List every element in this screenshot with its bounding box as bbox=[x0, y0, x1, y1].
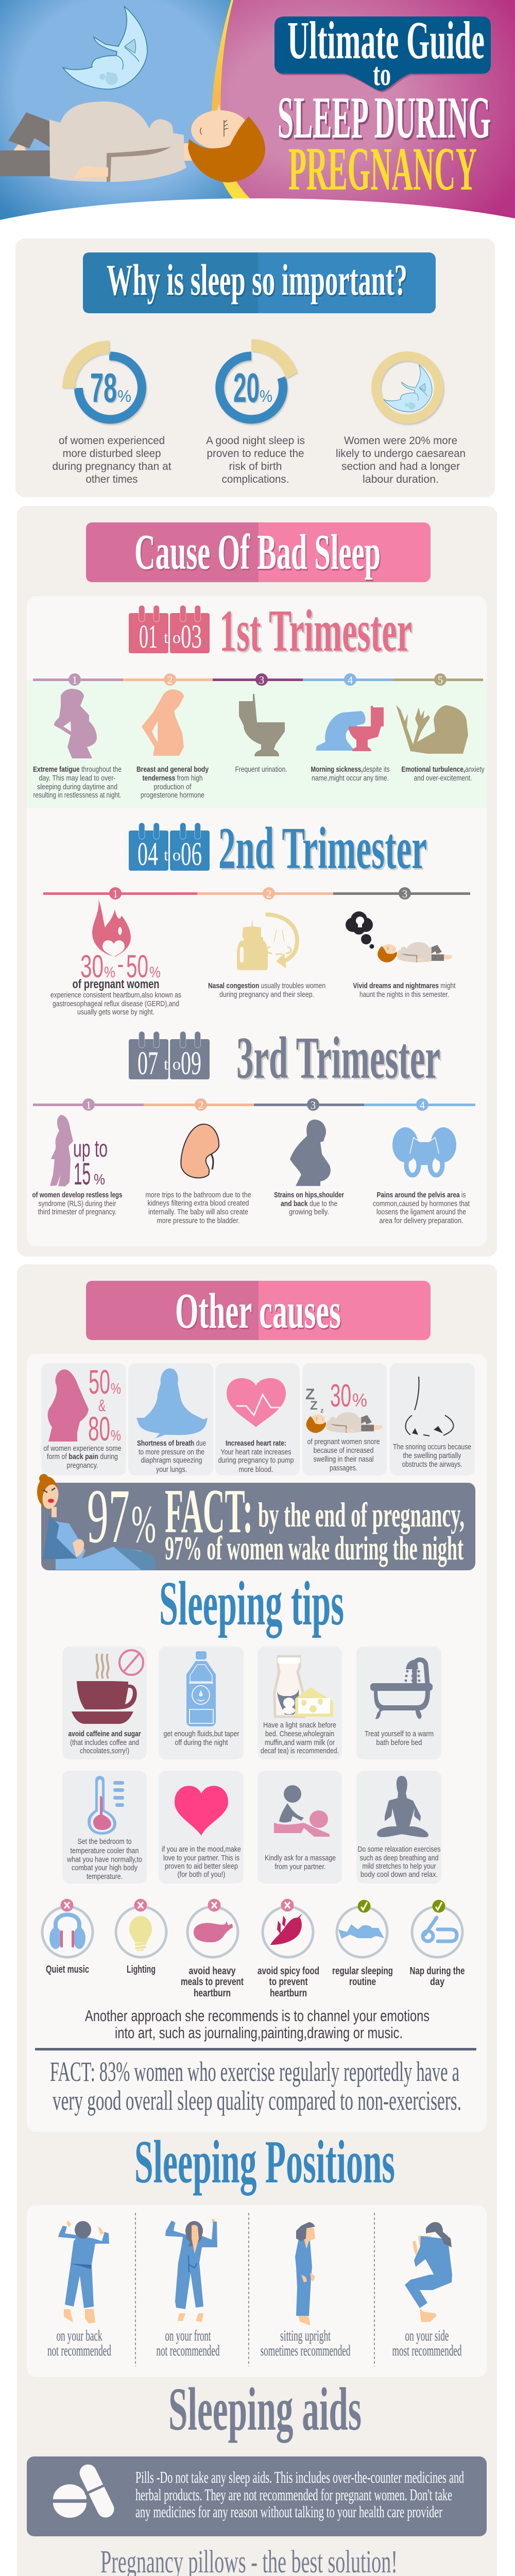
icon: baby bottle and nose bbox=[237, 914, 297, 970]
heading: why is sleep so important bbox=[83, 252, 436, 313]
icon: pregnant woman silhouette bbox=[54, 689, 97, 758]
captions: first trimester: Extreme fatigue throughout the bbox=[33, 765, 122, 774]
calendar: months 01 to 03 bbox=[129, 605, 210, 655]
card: shortness of breath: Shortness of breath due bbox=[137, 1439, 206, 1448]
card: snoring statistic: swelling in their nasal bbox=[313, 1455, 374, 1464]
stat: caesarean likelihood with moon: section and had a longer bbox=[341, 461, 460, 472]
heading: other causes bbox=[86, 1281, 431, 1340]
labels: positions: on your side bbox=[405, 2327, 449, 2344]
tip card: relaxation exercises: mild stretches to help your bbox=[363, 1862, 436, 1871]
card: snoring statistic: because of increased bbox=[313, 1446, 374, 1455]
tip card: light snack: bed. Cheese,wholegrain bbox=[265, 1730, 334, 1738]
tip card: relaxation exercises: Do some relaxation exercises bbox=[357, 1845, 441, 1854]
card: snoring statistic bbox=[302, 1363, 387, 1476]
stat: up to 15 percent: up to bbox=[73, 1135, 108, 1162]
tip card: make love: proven to aid better sleep bbox=[165, 1862, 238, 1871]
icon: regular sleeping routine: routine bbox=[349, 1976, 376, 1988]
tip card: light snack: decaf tea) is recommended. bbox=[261, 1747, 339, 1755]
tip card: cool bedroom: what you have normally,to bbox=[66, 1855, 142, 1864]
stat: 97 percent: 97 bbox=[87, 1473, 130, 1559]
stat: 30 to 50 percent heartburn: 30 bbox=[80, 949, 104, 985]
card: back pain: pregnancy. bbox=[67, 1461, 98, 1470]
card: snoring and nose: the swelling partially bbox=[403, 1451, 461, 1460]
icon: nap during the day: day bbox=[430, 1976, 445, 1988]
caption: pelvis pain: Pains around the pelvis area is bbox=[377, 1191, 466, 1199]
calendar: months 01 to 03: 01 bbox=[139, 618, 158, 655]
stat: 20 percent: complications. bbox=[221, 473, 289, 485]
labels: positions: most recommended bbox=[392, 2342, 461, 2359]
caption: pelvis pain bbox=[373, 1191, 470, 1225]
captions: first trimester: Breast and general body bbox=[136, 765, 209, 774]
stat: 30 to 50 percent heartburn: 50 bbox=[126, 949, 148, 985]
captions: first trimester: progesterone hormone bbox=[141, 791, 204, 800]
captions: first trimester: Emotional turbulence,anxiety bbox=[402, 765, 485, 774]
stat: 20 percent: proven to reduce the bbox=[207, 448, 304, 460]
caption: strains: and back due to the bbox=[281, 1199, 337, 1208]
tip card: avoid caffeine: avoid caffeine and sugar bbox=[68, 1730, 141, 1738]
labels: positions: on your front bbox=[165, 2327, 211, 2344]
tip card: relaxation exercises bbox=[356, 1771, 441, 1884]
caption: nasal congestion: Nasal congestion usually troubles women bbox=[208, 981, 325, 990]
caption: bathroom trips: more pressure to the bladder. bbox=[157, 1216, 240, 1225]
icon: spicy food: avoid spicy food bbox=[258, 1965, 319, 1977]
icon: kidney bbox=[181, 1124, 219, 1178]
header background bbox=[0, 0, 515, 232]
caption: heartburn: experience consistent heartburn,also known as bbox=[50, 991, 181, 999]
stat: caesarean likelihood with moon bbox=[336, 356, 466, 485]
stat: 78 percent: of women experienced bbox=[59, 435, 165, 447]
icon: spicy food: to prevent bbox=[269, 1976, 308, 1988]
tip card: cool bedroom: temperature cooler than bbox=[70, 1846, 139, 1855]
tip card: massage: Kindly ask for a massage bbox=[265, 1854, 336, 1862]
stat: 30 to 50 percent heartburn bbox=[80, 949, 161, 985]
title callout bbox=[274, 11, 491, 92]
timeline: three steps: 1 bbox=[113, 888, 118, 900]
caption: restless legs: syndrome (RLS) during their bbox=[38, 1199, 116, 1208]
calendar: months 04 to 06: to bbox=[164, 845, 181, 864]
card: snoring statistic: 30 bbox=[330, 1378, 351, 1414]
caption: pelvis pain: loosens the ligament around the bbox=[376, 1208, 466, 1216]
card: shortness of breath: diaphragm squeezing bbox=[141, 1456, 202, 1465]
tip card: cool bedroom: combat your high body bbox=[72, 1863, 138, 1872]
icon: nap during the day: Nap during the bbox=[410, 1965, 465, 1977]
card: back pain bbox=[41, 1363, 126, 1476]
calendar: months 07 to 09: 07 bbox=[138, 1045, 158, 1082]
stat: 78 percent: % bbox=[117, 387, 131, 405]
icon: woman at toilet bbox=[316, 706, 384, 751]
captions: first trimester: Morning sickness,despite its bbox=[311, 765, 389, 774]
card: increased heart rate: during pregnancy to pump bbox=[218, 1456, 294, 1465]
caption: vivid dreams: haunt the nights in this semester. bbox=[359, 990, 449, 999]
timeline: five steps bbox=[33, 673, 483, 686]
icon: nap during the day bbox=[410, 1900, 465, 1988]
illustration: pregnant woman in blue dress bbox=[37, 1474, 156, 1570]
stat: up to 15 percent bbox=[73, 1135, 108, 1191]
callout: 97 percent fact bbox=[37, 1473, 475, 1570]
stat: 20 percent: risk of birth bbox=[229, 461, 282, 472]
calendar: months 04 to 06: 06 bbox=[181, 836, 202, 873]
stat: 78 percent bbox=[53, 341, 171, 485]
timeline: three steps: 3 bbox=[402, 888, 407, 900]
stat: 20 percent bbox=[206, 339, 305, 485]
caption: restless legs bbox=[32, 1191, 123, 1216]
captions: first trimester: and over-excitement. bbox=[414, 774, 472, 783]
card: back pain: % bbox=[111, 1428, 121, 1444]
card: increased heart rate: Your heart rate increases bbox=[220, 1448, 291, 1456]
card: snoring statistic: % bbox=[352, 1389, 367, 1411]
card: snoring statistic: of pregnant women snore bbox=[307, 1437, 380, 1446]
card: increased heart rate bbox=[215, 1363, 300, 1476]
card: back pain: & bbox=[98, 1396, 106, 1415]
heading: sleeping aids: Sleeping aids bbox=[168, 2375, 362, 2443]
text: another approach bbox=[85, 2007, 430, 2042]
figure: on your side bbox=[405, 2222, 452, 2322]
caption: strains: growing belly. bbox=[289, 1208, 329, 1216]
figure: on your back bbox=[58, 2221, 109, 2324]
calendar: months 07 to 09: 09 bbox=[181, 1045, 201, 1082]
caption: strains: Strains on hips,shoulder bbox=[274, 1191, 344, 1199]
captions: first trimester: resulting in restlessness at night. bbox=[33, 791, 122, 800]
stat: 30 to 50 percent heartburn: % bbox=[149, 964, 161, 981]
stat: 20 percent: A good night sleep is bbox=[206, 435, 305, 447]
timeline: four steps: 1 bbox=[86, 1099, 91, 1111]
icon: pills bbox=[53, 2473, 107, 2518]
icon: nightmare cloud and sleeping woman bbox=[346, 911, 452, 962]
labels: positions: not recommended bbox=[157, 2342, 219, 2359]
caption: bathroom trips bbox=[145, 1191, 251, 1225]
tip card: light snack: Have a light snack before bbox=[263, 1721, 336, 1730]
stat: caesarean likelihood with moon: likely to undergo caesarean bbox=[336, 448, 466, 460]
stat: up to 15 percent: % bbox=[94, 1172, 105, 1188]
icon: pelvis bbox=[392, 1127, 456, 1175]
section: 3rd trimester bbox=[32, 1025, 475, 1225]
card: shortness of breath: your lungs. bbox=[156, 1465, 187, 1474]
icon: lighting bbox=[116, 1899, 166, 1975]
icon: heavy meals bbox=[181, 1899, 244, 1999]
tip card: enough fluids: off during the night bbox=[175, 1738, 228, 1747]
stat: up to 15 percent: 15 bbox=[74, 1157, 91, 1191]
caption: vivid dreams bbox=[353, 981, 456, 999]
text: exercise fact bbox=[50, 2056, 461, 2116]
caption: pelvis pain: common,caused by hormones that bbox=[373, 1199, 470, 1208]
stat: 30 to 50 percent heartburn: - bbox=[117, 955, 124, 975]
calendar: months 07 to 09 bbox=[129, 1031, 210, 1082]
card: snoring and nose bbox=[390, 1363, 475, 1476]
stat: 20 percent: % bbox=[260, 387, 272, 405]
caption: restless legs: of women develop restless legs bbox=[32, 1191, 123, 1199]
tip card: massage: from your partner. bbox=[275, 1862, 325, 1871]
card: back pain: 80 bbox=[88, 1410, 110, 1448]
icon: toilet bbox=[239, 694, 285, 756]
callout: pills warning bbox=[27, 2456, 487, 2536]
icon: woman silhouette bbox=[142, 689, 184, 756]
timeline: three steps bbox=[43, 887, 470, 900]
stat: 78 percent: during pregnancy than at bbox=[53, 461, 171, 472]
icon: lighting: Lighting bbox=[127, 1964, 156, 1975]
card: back pain: 50 bbox=[89, 1363, 110, 1401]
panel: other causes, tips, positions and aids bbox=[17, 1264, 497, 2576]
labels: positions: on your back bbox=[57, 2327, 102, 2344]
panel: why is sleep so important bbox=[15, 239, 495, 497]
timeline: five steps: 2 bbox=[167, 674, 173, 686]
heading: other causes: Other causes bbox=[175, 1283, 341, 1339]
tip card: cool bedroom: temperature. bbox=[87, 1872, 123, 1881]
captions: first trimester bbox=[33, 765, 485, 800]
icon: spicy food: heartburn bbox=[270, 1988, 307, 1999]
tip card: warm bath: bath before bed bbox=[376, 1738, 422, 1747]
labels: positions: not recommended bbox=[47, 2342, 111, 2359]
labels: positions: sitting upright bbox=[280, 2327, 331, 2344]
header banner bbox=[0, 0, 515, 232]
tip card: massage bbox=[258, 1771, 342, 1884]
stat: 20 percent: 20 bbox=[233, 365, 260, 411]
card: snoring statistic: Z bbox=[310, 1399, 318, 1413]
stat: 78 percent: 78 bbox=[90, 365, 117, 411]
tip card: cool bedroom bbox=[62, 1771, 147, 1884]
card: snoring statistic: passages. bbox=[330, 1464, 357, 1472]
stat: caesarean likelihood with moon: Women were 20% more bbox=[344, 435, 457, 447]
tip card: avoid caffeine bbox=[62, 1647, 147, 1759]
figure: on your front bbox=[165, 2219, 217, 2322]
timeline: five steps: 5 bbox=[438, 674, 443, 686]
section: 1st trimester bbox=[33, 598, 485, 800]
tip card: light snack: muffin,and warm milk (or bbox=[265, 1738, 335, 1747]
tip card: enough fluids bbox=[159, 1647, 244, 1759]
captions: first trimester: Frequent urination. bbox=[235, 765, 287, 774]
captions: first trimester: sleeping during daytime and bbox=[37, 783, 117, 791]
stat: caesarean likelihood with moon: labour duration. bbox=[363, 473, 439, 485]
caption: heartburn: gastroesophageal reflux disease (GERD),and bbox=[53, 999, 179, 1008]
icon: sleeping pregnant woman bbox=[0, 101, 265, 182]
icon: pregnant woman profile bbox=[290, 1120, 331, 1186]
icon: heavy meals: avoid heavy bbox=[188, 1965, 236, 1977]
icon: heavy meals: heartburn bbox=[194, 1988, 231, 1999]
timeline: five steps: 4 bbox=[348, 674, 353, 686]
caption: bathroom trips: internally. The baby will also create bbox=[148, 1208, 248, 1216]
figure: sitting upright bbox=[295, 2222, 315, 2326]
panel: cause of bad sleep bbox=[17, 506, 497, 1257]
stat: 78 percent: more disturbed sleep bbox=[63, 448, 161, 460]
icon: heartburn flame bbox=[92, 899, 131, 957]
tip card: make love bbox=[159, 1771, 244, 1884]
tip card: warm bath: Treat yourself to a warm bbox=[365, 1730, 434, 1738]
card: increased heart rate: more blood. bbox=[239, 1465, 273, 1474]
tip card: make love: love to your partner. This is bbox=[163, 1854, 239, 1862]
captions: first trimester: name,might occur any time. bbox=[312, 774, 389, 783]
tip card: avoid caffeine: chocolates,sorry!) bbox=[80, 1747, 129, 1755]
caption: heartburn: of pregnant women bbox=[72, 977, 160, 991]
tip card: relaxation exercises: such as deep breathing and bbox=[359, 1854, 439, 1862]
timeline: three steps: 2 bbox=[266, 888, 271, 900]
card: snoring statistic: Z bbox=[305, 1386, 315, 1403]
tip card: cool bedroom: Set the bedroom to bbox=[77, 1837, 132, 1846]
stat: 97 percent: % bbox=[131, 1495, 156, 1554]
heading: cause of bad sleep bbox=[86, 522, 431, 582]
card: snoring and nose: obstructs the airways. bbox=[402, 1460, 462, 1469]
tip card: make love: (for both of you!) bbox=[177, 1870, 226, 1879]
labels: positions: sometimes recommended bbox=[261, 2342, 350, 2359]
labels: positions bbox=[47, 2327, 461, 2359]
icon: regular sleeping routine bbox=[332, 1900, 393, 1988]
tip card: relaxation exercises: body cool down and relax. bbox=[360, 1870, 438, 1879]
stat: 78 percent: other times bbox=[85, 473, 138, 485]
caption: restless legs: third trimester of pregnancy. bbox=[38, 1208, 116, 1216]
panel: sleeping positions bbox=[27, 2205, 487, 2377]
captions: first trimester: production of bbox=[153, 783, 192, 791]
calendar: months 01 to 03: 03 bbox=[181, 618, 202, 655]
card: back pain: % bbox=[111, 1381, 121, 1397]
icon: anxious woman silhouette bbox=[396, 705, 468, 754]
tip card: light snack bbox=[258, 1647, 342, 1759]
card: back pain: form of back pain during bbox=[47, 1452, 118, 1461]
text: fact statement: FACT: bbox=[165, 1477, 253, 1546]
tip card: warm bath bbox=[356, 1647, 441, 1759]
icon: heavy meals: meals to prevent bbox=[181, 1976, 244, 1988]
icon: quiet music: Quiet music bbox=[46, 1964, 89, 1975]
card: snoring statistic: z bbox=[320, 1406, 324, 1414]
caption: nasal congestion: during pregnancy and their sleep. bbox=[219, 990, 314, 999]
captions: first trimester: tenderness from high bbox=[142, 774, 203, 783]
timeline: four steps: 4 bbox=[420, 1099, 425, 1111]
icon: regular sleeping routine: regular sleeping bbox=[332, 1965, 393, 1977]
heading: sleeping tips: Sleeping tips bbox=[159, 1569, 344, 1638]
text: fact statement bbox=[165, 1477, 465, 1567]
captions: first trimester: day. This may lead to over- bbox=[39, 774, 115, 783]
caption: bathroom trips: more trips to the bathroom due to the bbox=[145, 1191, 251, 1199]
calendar: months 04 to 06 bbox=[129, 823, 210, 873]
tip card: enough fluids: get enough fluids,but taper bbox=[164, 1730, 239, 1738]
icon: crescent moon bbox=[63, 6, 147, 89]
stat: 30 to 50 percent heartburn: % bbox=[104, 964, 115, 981]
icon: spicy food bbox=[258, 1899, 319, 1999]
text: pills warning bbox=[135, 2468, 464, 2521]
caption: strains bbox=[274, 1191, 344, 1216]
caption: vivid dreams: Vivid dreams and nightmares might bbox=[353, 981, 456, 990]
timeline: four steps: 3 bbox=[311, 1099, 316, 1111]
timeline: four steps: 2 bbox=[198, 1099, 203, 1111]
caption: heartburn bbox=[50, 977, 181, 1016]
timeline: five steps: 3 bbox=[259, 674, 264, 686]
card: snoring and nose: The snoring occurs because bbox=[393, 1443, 471, 1451]
calendar: months 04 to 06: 04 bbox=[138, 836, 158, 873]
caption: nasal congestion bbox=[208, 981, 325, 999]
icon: quiet music bbox=[42, 1899, 93, 1975]
caption: pelvis pain: area for delivery preparation. bbox=[379, 1216, 464, 1225]
timeline: four steps bbox=[33, 1098, 475, 1111]
tip card: avoid caffeine: (that includes coffee and bbox=[70, 1738, 139, 1747]
text: another approach: into art, such as journaling,painting,drawing or music. bbox=[115, 2024, 403, 2042]
card: shortness of breath: to more pressure on the bbox=[139, 1448, 204, 1456]
timeline: five steps: 1 bbox=[72, 674, 77, 686]
section: 2nd trimester bbox=[43, 816, 470, 1016]
title callout: to bbox=[373, 57, 391, 92]
calendar: months 07 to 09: to bbox=[164, 1055, 181, 1073]
caption: bathroom trips: kidneys filtering extra blood created bbox=[147, 1199, 249, 1208]
icon: woman with restless legs bbox=[50, 1115, 73, 1187]
card: back pain: of women experience some bbox=[43, 1444, 122, 1453]
tip card: make love: if you are in the mood,make bbox=[162, 1845, 241, 1854]
calendar: months 01 to 03: to bbox=[164, 628, 181, 647]
card: shortness of breath bbox=[128, 1363, 213, 1476]
caption: heartburn: usually gets worse by night. bbox=[77, 1008, 154, 1016]
card: increased heart rate: Increased heart rate: bbox=[226, 1439, 286, 1448]
